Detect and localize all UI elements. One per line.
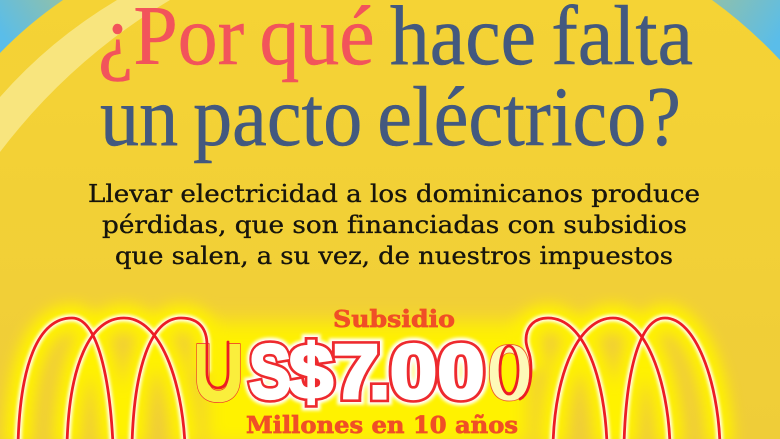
subtitle line 1: Llevar electricidad a los dominicanos produce [88, 180, 700, 208]
amount white halo: 0 [438, 330, 484, 415]
amount digits red outline [249, 330, 484, 415]
blue corner right [712, 0, 780, 60]
amount digits white fill: 0 [438, 330, 484, 415]
amount white halo: $ [289, 330, 333, 415]
electric wire right coil [500, 318, 720, 439]
millions label: Millones en 10 años [246, 412, 518, 439]
amount digits red outline: 0 [438, 330, 484, 415]
subtitle text block [88, 180, 700, 270]
amount white halo: 7 [333, 330, 379, 415]
amount digits white fill: S [249, 330, 291, 415]
amount digits white fill [249, 330, 484, 415]
amount digits red outline: 0 [390, 330, 437, 415]
amount digits red outline: 7 [333, 330, 379, 415]
blue corner left [0, 0, 63, 53]
amount letter U: U [194, 328, 243, 417]
amount digits red outline: $ [289, 330, 333, 415]
amount digits white fill: 7 [333, 330, 379, 415]
amount white halo [249, 330, 484, 415]
amount digits red outline: . [369, 330, 390, 415]
amount digits white fill: 0 [390, 330, 437, 415]
subtitle line 2: pérdidas, que son financiadas con subsidios [102, 211, 687, 239]
amount letter U: U [194, 328, 243, 417]
subtitle line 3: que salen, a su vez, de nuestros impuestos [115, 242, 673, 270]
amount [194, 328, 533, 417]
amount digits red outline: S [249, 330, 291, 415]
amount white halo: . [369, 330, 390, 415]
title [98, 0, 693, 164]
glow behind wire and amount [18, 318, 720, 439]
subsidy label: Subsidio [333, 306, 455, 333]
bulb highlight arc [0, 0, 170, 152]
electric wire left coil [18, 318, 228, 439]
amount white halo: S [249, 330, 291, 415]
amount digits white fill: . [369, 330, 390, 415]
amount white halo: 0 [390, 330, 437, 415]
amount digits white fill: $ [289, 330, 333, 415]
amount last zero: 0 [486, 328, 533, 417]
title line 2: un pacto eléctrico? [100, 70, 681, 164]
